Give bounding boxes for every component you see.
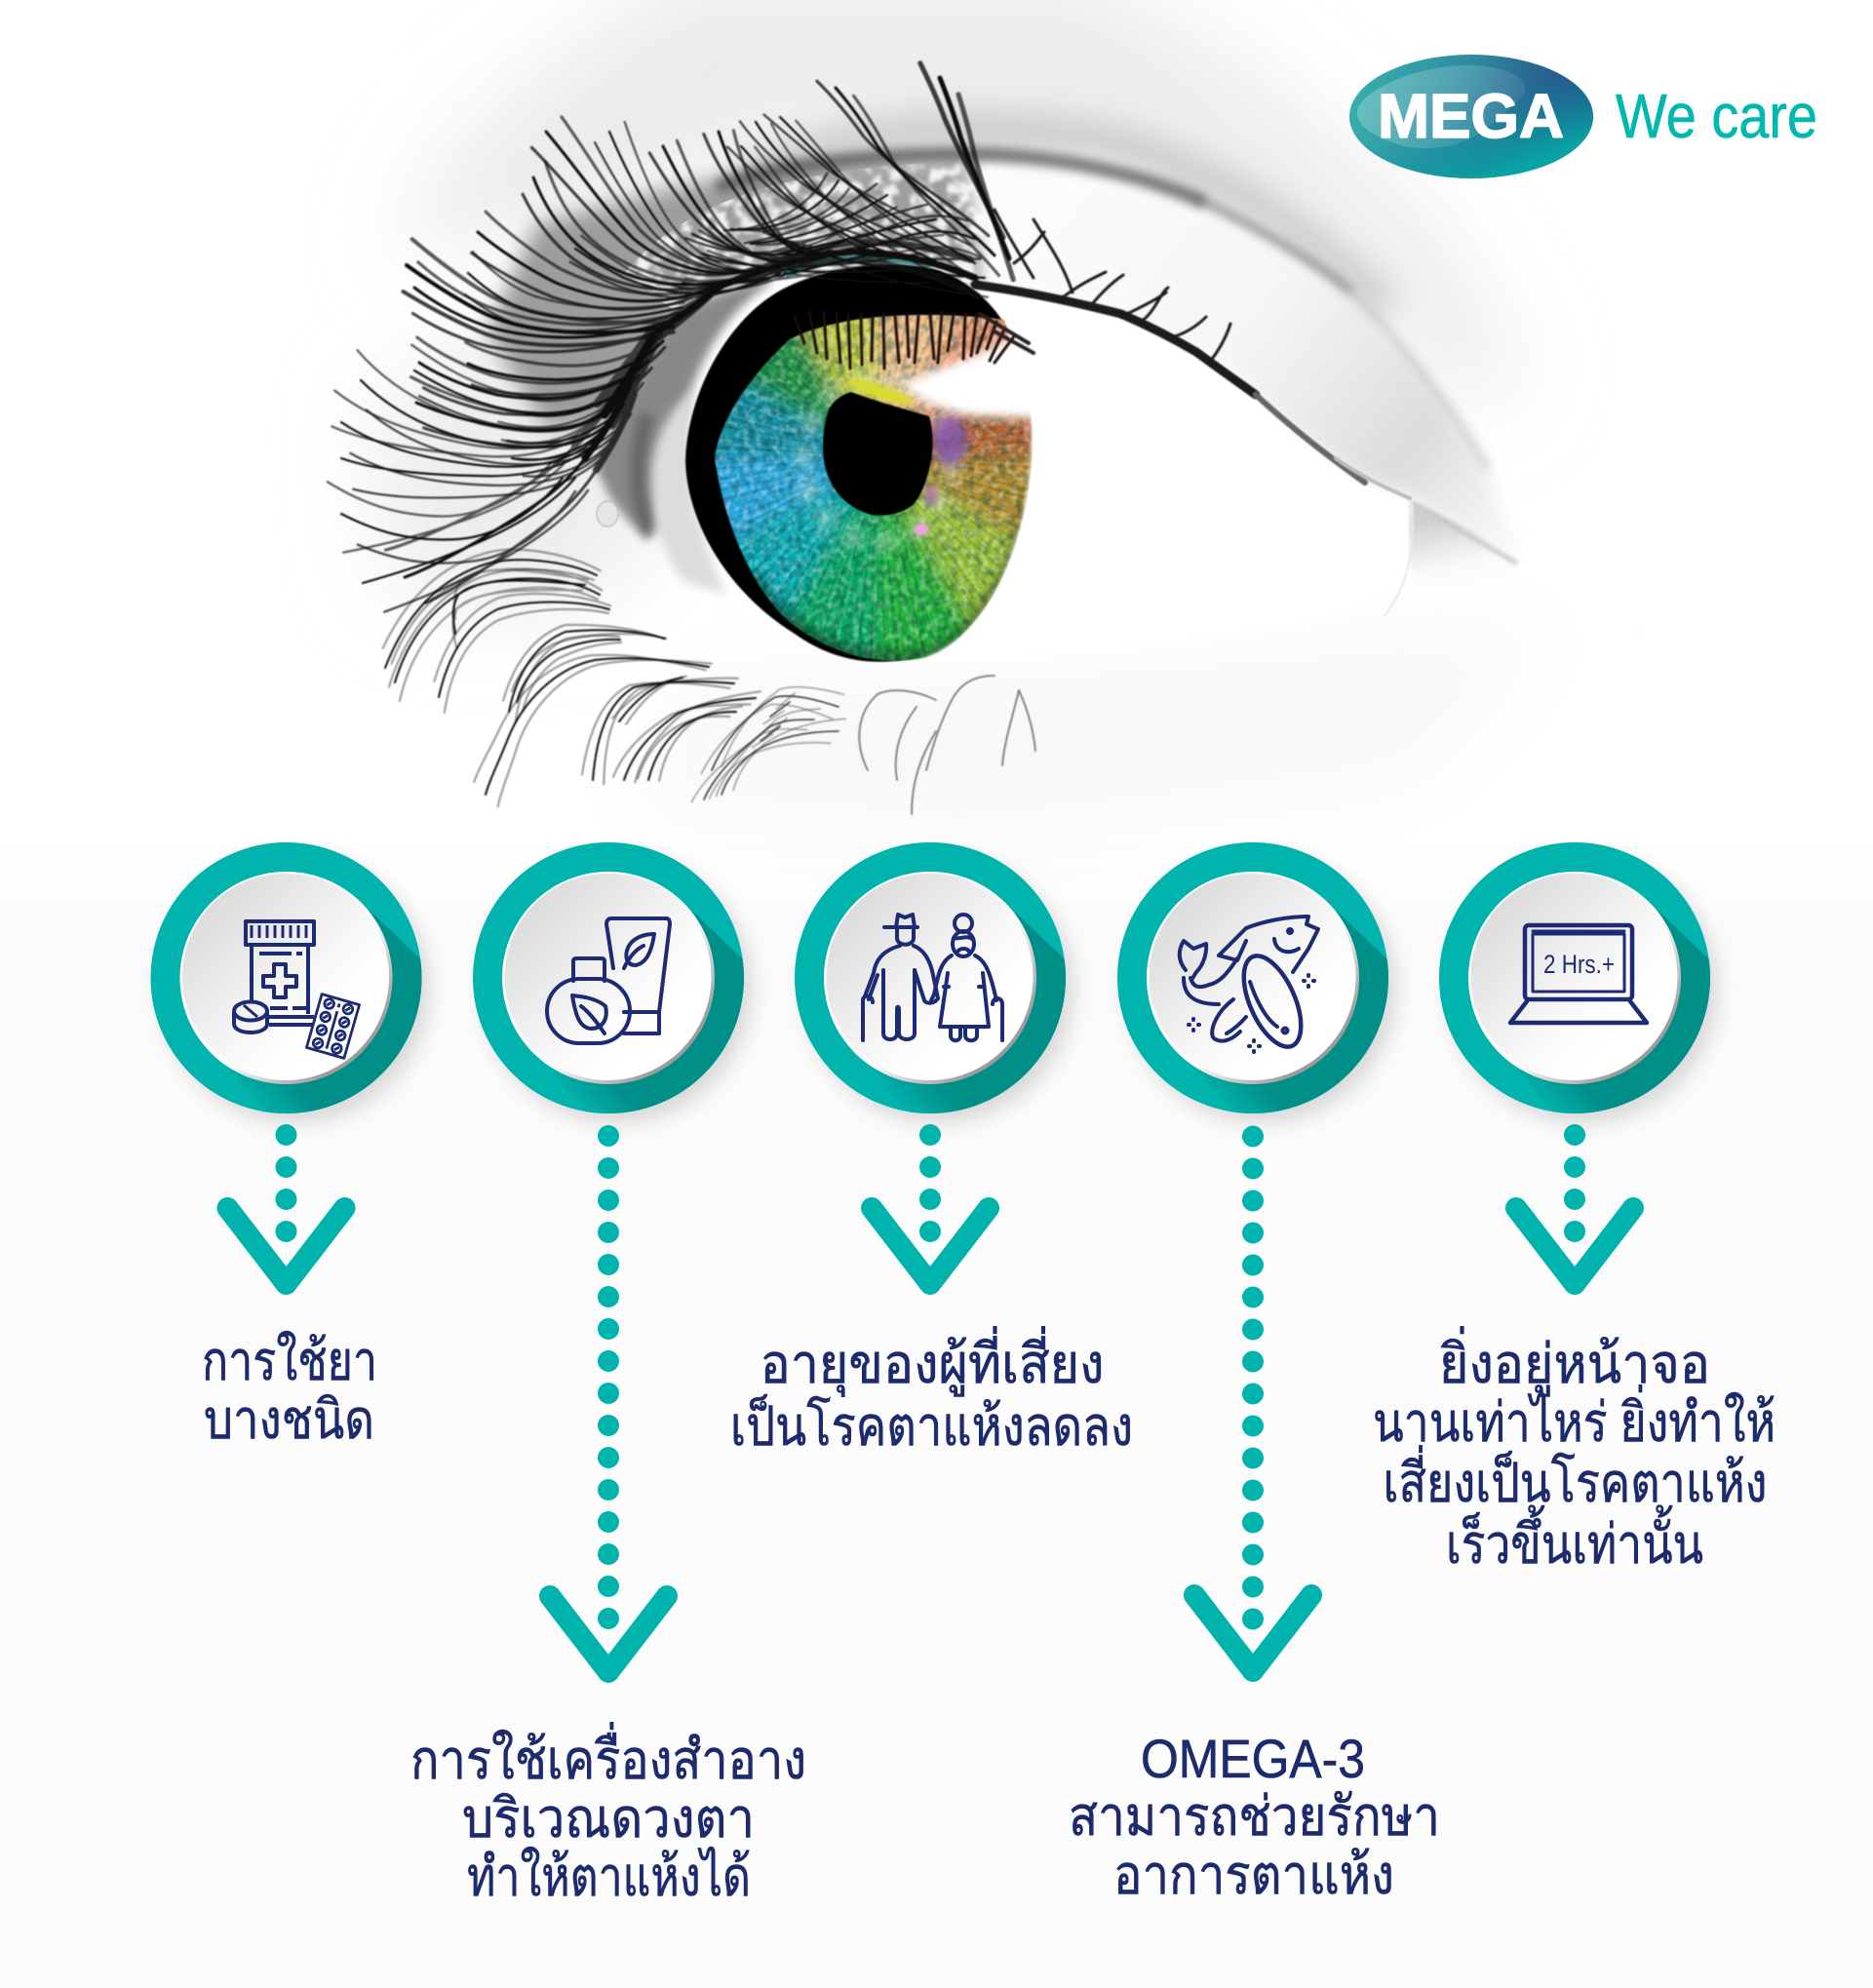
arrow bbox=[1194, 1595, 1311, 1671]
dotted connector bbox=[598, 1136, 619, 1619]
logo oval bbox=[1349, 55, 1593, 178]
badge bbox=[795, 842, 1145, 1212]
arrow bbox=[550, 1596, 667, 1672]
caption: บางชนิด bbox=[204, 1388, 374, 1450]
step 3: age bbox=[730, 842, 1145, 1457]
skin tone around the eye bbox=[371, 0, 1560, 838]
dotted connector bbox=[1564, 1135, 1585, 1232]
iris dark rim bbox=[685, 264, 1006, 662]
teal reflection on lid bbox=[785, 257, 931, 275]
glare across iris bbox=[845, 312, 1082, 429]
step 5: screen time bbox=[1373, 842, 1789, 1575]
caption: บริเวณดวงตา bbox=[462, 1787, 755, 1849]
badge bbox=[473, 842, 823, 1212]
grey skin behind lashes bbox=[478, 155, 991, 439]
caption bbox=[1373, 1326, 1775, 1575]
lashes over iris bbox=[795, 312, 1034, 369]
eye photograph bbox=[322, 0, 1560, 838]
caption: ยิ่งอยู่หน้าจอ bbox=[1439, 1326, 1710, 1397]
pale collarette bbox=[803, 378, 952, 542]
socket shading left of iris bbox=[597, 278, 770, 595]
badge bbox=[150, 842, 501, 1212]
iris fibres bbox=[756, 334, 999, 578]
tear droplet bbox=[597, 501, 618, 526]
dotted connector bbox=[275, 1135, 296, 1232]
dark lower edge bbox=[751, 507, 1029, 657]
dotted connector bbox=[919, 1135, 941, 1232]
caption: อายุของผู้ที่เสี่ยง bbox=[761, 1326, 1104, 1397]
caption: การใช้ยา bbox=[202, 1330, 377, 1391]
icon: laptop with 2 Hrs.+: 2 Hrs.+ bbox=[1543, 950, 1615, 979]
arrow bbox=[228, 1208, 345, 1284]
arrow bbox=[1516, 1208, 1633, 1284]
lower eyelashes bbox=[373, 540, 1035, 818]
tear duct corner bbox=[1385, 502, 1519, 616]
icon: medicine bottle and pills bbox=[234, 921, 360, 1058]
upper eyelashes bbox=[322, 48, 1230, 613]
icon: elderly couple bbox=[863, 915, 1002, 1040]
dotted connector bbox=[1242, 1137, 1264, 1619]
caption bbox=[1069, 1728, 1440, 1905]
caption: สามารถช่วยรักษา bbox=[1069, 1785, 1440, 1847]
caption: เป็นโรคตาแห้งลดลง bbox=[730, 1393, 1133, 1457]
upper eyelid bbox=[965, 159, 1519, 565]
caption bbox=[202, 1330, 377, 1450]
icon: laptop with 2 Hrs.+ bbox=[1510, 925, 1647, 1023]
tagline: We care bbox=[1616, 81, 1817, 151]
caption: อาการตาแห้ง bbox=[1113, 1844, 1394, 1905]
pupil bbox=[823, 392, 933, 516]
step 4: omega-3 bbox=[1069, 842, 1467, 1905]
eyelid crease bbox=[722, 154, 1487, 468]
caption bbox=[410, 1722, 806, 1907]
badge bbox=[1439, 842, 1789, 1212]
purple patch bbox=[932, 415, 967, 466]
badge bbox=[1117, 842, 1467, 1212]
logo oval: MEGA bbox=[1378, 81, 1564, 151]
step 2: eye cosmetics bbox=[410, 842, 823, 1907]
caption: ทำให้ตาแห้งได้ bbox=[467, 1846, 751, 1907]
caption bbox=[730, 1326, 1133, 1457]
soft right edge of iris bbox=[926, 419, 1034, 660]
caption: เสี่ยงเป็นโรคตาแห้ง bbox=[1383, 1445, 1767, 1513]
logo: MEGA We care bbox=[1349, 55, 1817, 178]
arrow bbox=[872, 1208, 989, 1284]
icon: cosmetic tube and jar bbox=[547, 918, 670, 1043]
caption: นานเท่าไหร่ ยิ่งทำให้ bbox=[1373, 1384, 1775, 1453]
upper lash line bbox=[975, 285, 1410, 498]
short lashes along outer lid bbox=[995, 210, 1230, 363]
caption: การใช้เครื่องสำอาง bbox=[410, 1722, 806, 1790]
white of the eye bbox=[940, 291, 1413, 665]
caption: OMEGA-3 bbox=[1141, 1728, 1365, 1789]
step 1: medication bbox=[150, 842, 501, 1450]
iris colour wheel bbox=[714, 314, 1034, 662]
icon: fish and capsules bbox=[1180, 916, 1318, 1055]
caption: เร็วขึ้นเท่านั้น bbox=[1446, 1505, 1703, 1575]
